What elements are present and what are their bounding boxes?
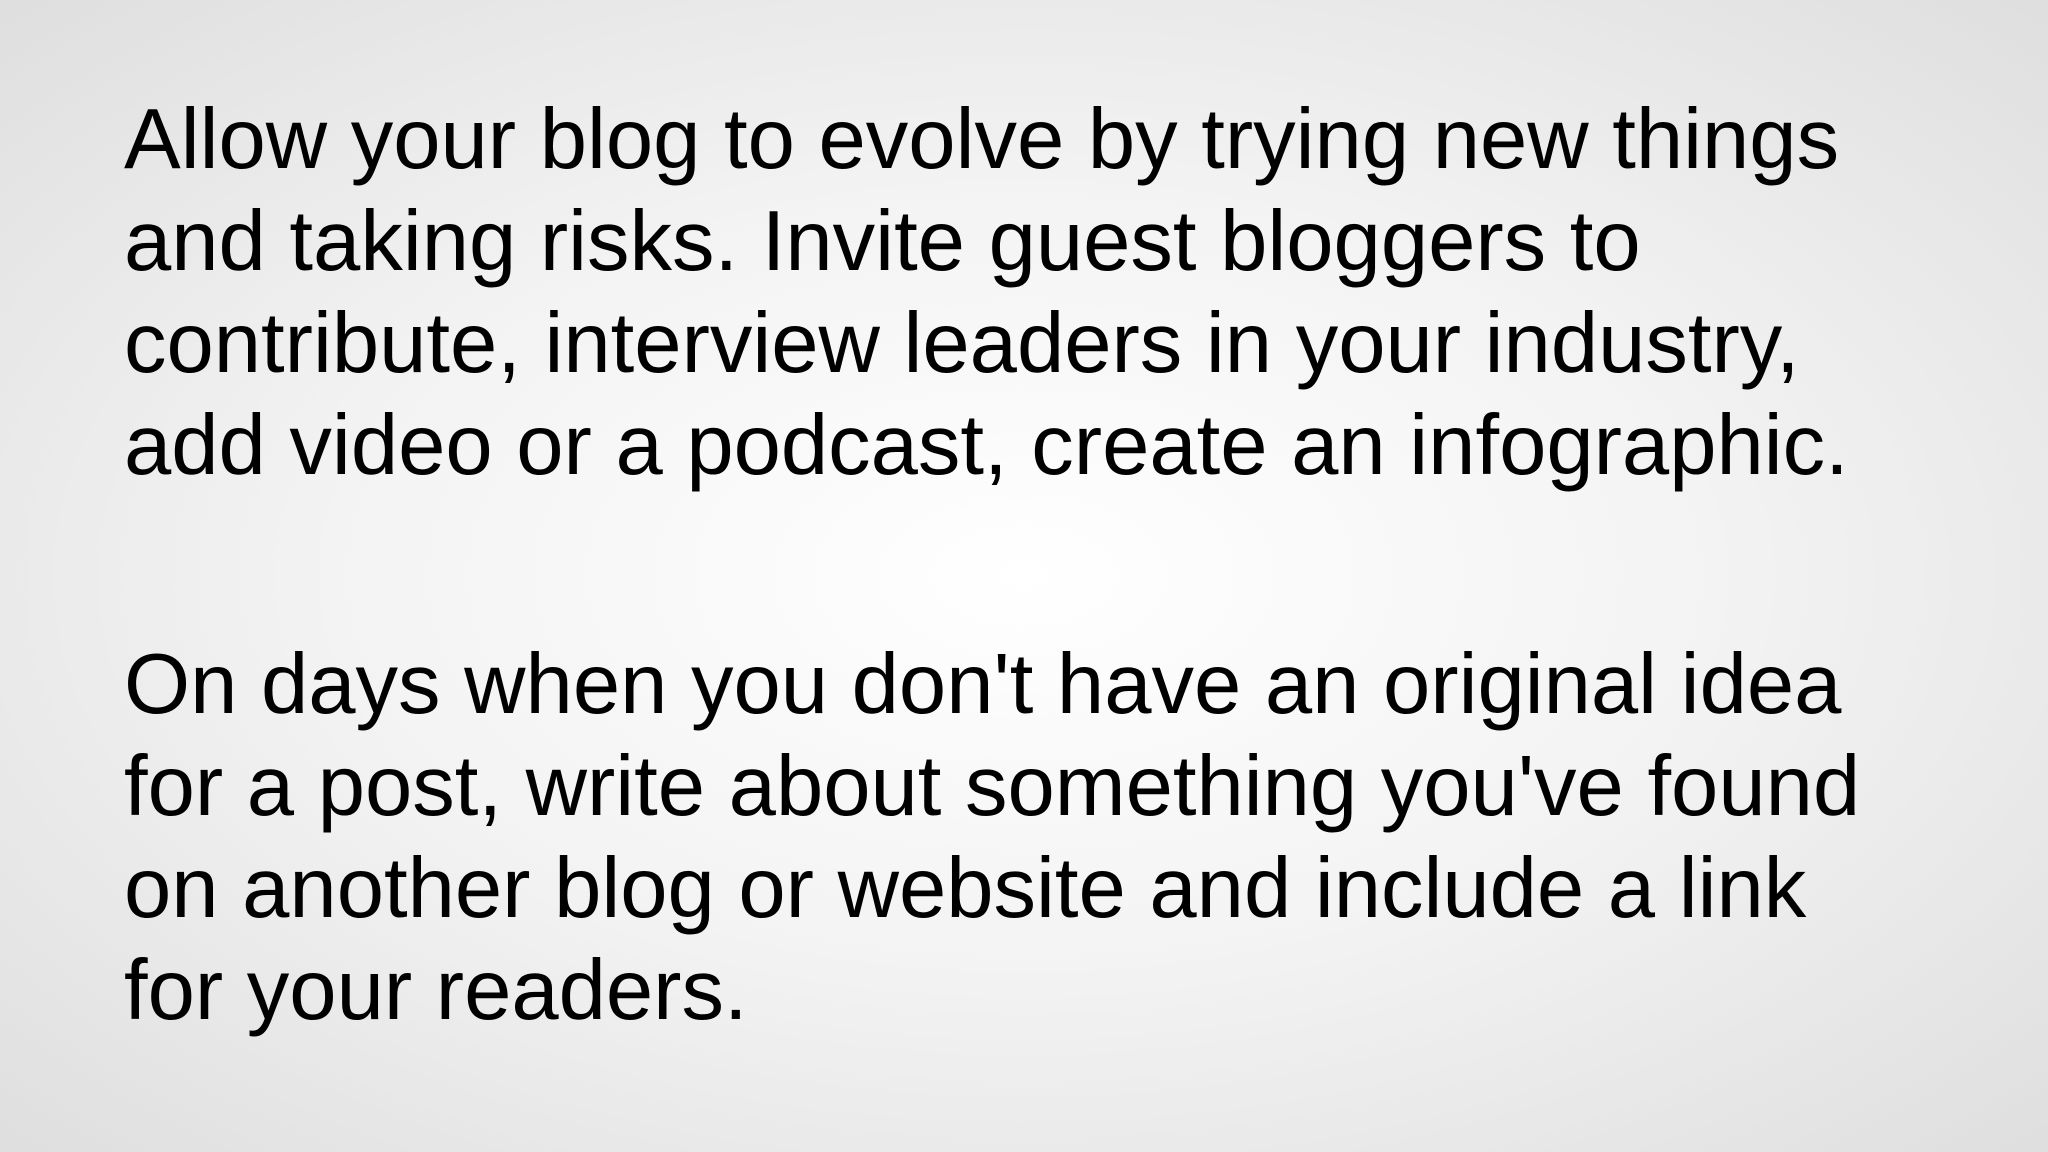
- text block: original idea paragraph: for a post, write about something you've found: [124, 739, 1860, 834]
- text block: original idea paragraph: On days when you don't have an original idea: [124, 637, 1841, 732]
- text block: evolve paragraph: contribute, interview leaders in your industry,: [124, 296, 1800, 391]
- text block: original idea paragraph: on another blog or website and include a link: [124, 841, 1806, 936]
- text block: original idea paragraph: [124, 637, 1860, 1038]
- text block: evolve paragraph: Allow your blog to evolve by trying new things: [124, 92, 1839, 187]
- text block: evolve paragraph: add video or a podcast, create an infographic.: [124, 398, 1849, 493]
- text block: evolve paragraph: [124, 92, 1849, 493]
- text block: evolve paragraph: and taking risks. Invite guest bloggers to: [124, 194, 1641, 289]
- text block: original idea paragraph: for your readers.: [124, 943, 748, 1038]
